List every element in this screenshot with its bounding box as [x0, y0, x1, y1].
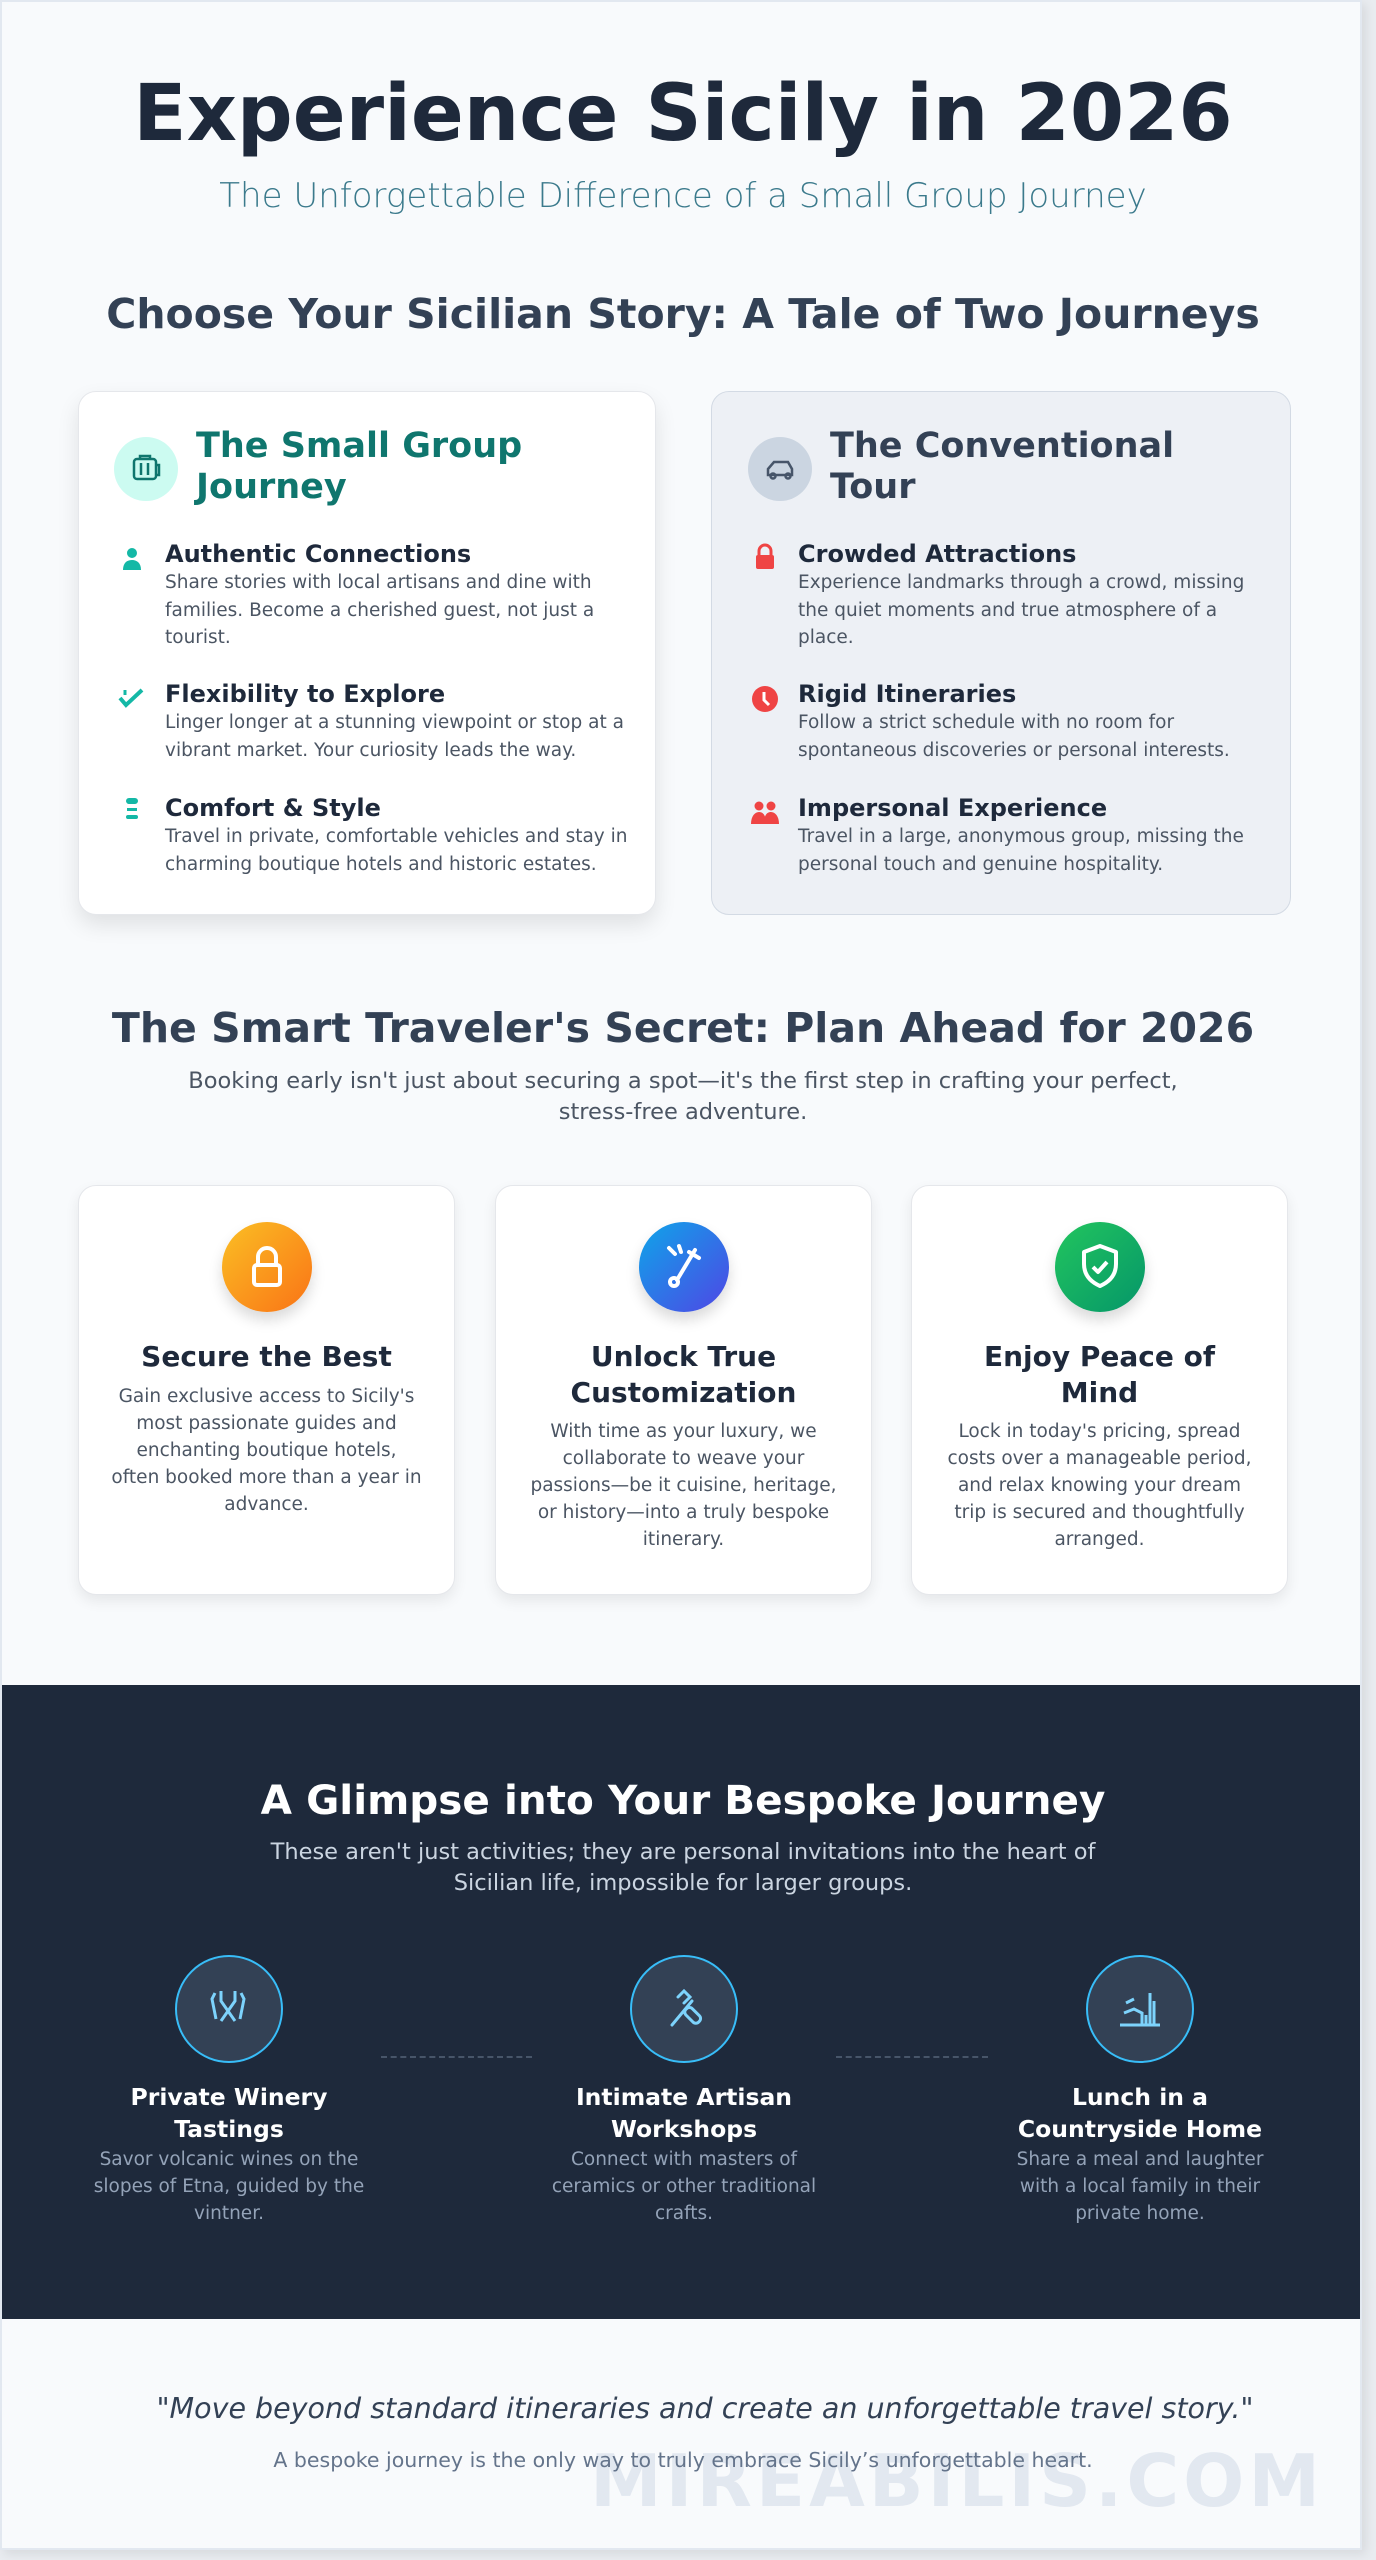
item: rigid: Rigid Itineraries: [798, 680, 1016, 708]
card: peace of mind: Mind: [1061, 1376, 1138, 1409]
panel title: Journey: [196, 467, 347, 507]
section heading: plan ahead: The Smart Traveler's Secret: Plan Ahead for 2026: [112, 1004, 1254, 1052]
item title: countryside: [1018, 2083, 1262, 2143]
connector: dashed 2: [836, 2056, 988, 2058]
item: impersonal: [751, 794, 1244, 874]
panel title: The Conventional: [830, 426, 1174, 466]
card: customization: [495, 1185, 872, 1595]
item title: winery: Tastings: [174, 2115, 284, 2143]
item: authentic connections: Share stories with local artisans and dine with families. Become a cherished guest, not just a tourist.: [165, 572, 594, 648]
icon: suitcase: [114, 437, 178, 501]
panel title: Tour: [830, 467, 915, 507]
quote: "Move beyond standard itineraries and create an unforgettable travel story.": [156, 2392, 1254, 2425]
icon: bus: [748, 437, 812, 501]
item title: artisan: Workshops: [611, 2115, 757, 2143]
item: comfort: Comfort & Style: [165, 794, 381, 822]
card: peace of mind: Enjoy Peace of: [984, 1340, 1215, 1373]
item: comfort: [126, 794, 628, 874]
card: secure the best: advance.: [224, 1494, 309, 1515]
item: rigid: [752, 680, 1230, 760]
item title: winery: [131, 2083, 327, 2143]
item: flexibility: Linger longer at a stunning viewpoint or stop at a vibrant market. Your curiosity leads the way.: [165, 712, 624, 760]
card: customization: With time as your luxury, we collaborate to weave your passions—be it cuisine, heritage, or history—into a truly bespoke itinerary.: [530, 1421, 837, 1550]
panel: conventional tour: [711, 391, 1291, 915]
card: peace of mind: [911, 1185, 1288, 1595]
card: secure the best: most passionate guides and: [136, 1413, 397, 1434]
item: crowded: [756, 540, 1244, 648]
panel title: [830, 426, 1174, 507]
item title: artisan: [576, 2083, 792, 2143]
card: secure the best: Gain exclusive access to Sicily's: [119, 1386, 414, 1407]
card: secure the best: Secure the Best: [141, 1340, 392, 1373]
item text: countryside: Share a meal and laughter with a local family in their private home.: [1017, 2149, 1263, 2224]
item text: artisan: Connect with masters of ceramics or other traditional crafts.: [552, 2149, 816, 2224]
item: impersonal: Travel in a large, anonymous group, missing the personal touch and genuine hospitality.: [798, 826, 1244, 874]
section intro text: Booking early isn't just about securing a spot—it's the first step in crafting your perfect, stress-free adventure.: [188, 1068, 1178, 1125]
icon: countryside home: [1086, 1955, 1194, 2063]
item title: countryside: Lunch in a: [1072, 2083, 1208, 2111]
item: impersonal: Impersonal Experience: [798, 794, 1107, 822]
dark panel: bespoke journey: [2, 1685, 1364, 2319]
card: peace of mind: Lock in today's pricing, spread costs over a manageable period, and relax knowing your dream trip is secured and thoughtfully arranged.: [947, 1421, 1252, 1550]
card: customization: Customization: [571, 1376, 796, 1409]
icon: artisan: [630, 1955, 738, 2063]
item: flexibility: [118, 680, 624, 760]
item: flexibility: Flexibility to Explore: [165, 680, 445, 708]
icon: lock: [222, 1222, 312, 1312]
icon: tools: [639, 1222, 729, 1312]
item: authentic connections: [123, 540, 594, 648]
section heading: two journeys: Choose Your Sicilian Story: A Tale of Two Journeys: [106, 290, 1260, 338]
title: Experience Sicily in 2026: [133, 69, 1233, 159]
card: secure the best: enchanting boutique hotels,: [136, 1440, 397, 1461]
item text: winery: Savor volcanic wines on the slopes of Etna, guided by the vintner.: [94, 2149, 364, 2224]
subtitle: The Unforgettable Difference of a Small Group Journey: [219, 176, 1147, 216]
heading: A Glimpse into Your Bespoke Journey: [261, 1776, 1105, 1824]
item title: artisan: Intimate Artisan: [576, 2083, 792, 2111]
connector: dashed 1: [381, 2056, 532, 2058]
panel: small group journey: [78, 391, 656, 915]
intro text: These aren't just activities; they are personal invitations into the heart of Sicilian life, impossible for larger groups.: [271, 1839, 1095, 1896]
item: rigid: Follow a strict schedule with no room for spontaneous discoveries or personal interests.: [798, 712, 1230, 760]
item title: winery: Private Winery: [131, 2083, 327, 2111]
watermark: MIREABILIS.COM: [590, 2439, 1324, 2523]
panel title: [194, 426, 522, 507]
panel title: The Small Group: [196, 426, 522, 466]
icon: shield: [1055, 1222, 1145, 1312]
closing line: A bespoke journey is the only way to truly embrace Sicily’s unforgettable heart.: [273, 2448, 1093, 2472]
card: secure the best: [78, 1185, 455, 1595]
card: customization: Unlock True: [591, 1340, 776, 1373]
icon: winery: [175, 1955, 283, 2063]
item: comfort: Travel in private, comfortable vehicles and stay in charming boutique hotels and historic estates.: [165, 826, 628, 874]
item title: countryside: Countryside Home: [1018, 2115, 1262, 2143]
card: secure the best: often booked more than a year in: [111, 1467, 422, 1488]
item: authentic connections: Authentic Connections: [165, 540, 471, 568]
item: crowded: Crowded Attractions: [798, 540, 1076, 568]
item: crowded: Experience landmarks through a crowd, missing the quiet moments and true atmosphere of a place.: [798, 572, 1244, 648]
